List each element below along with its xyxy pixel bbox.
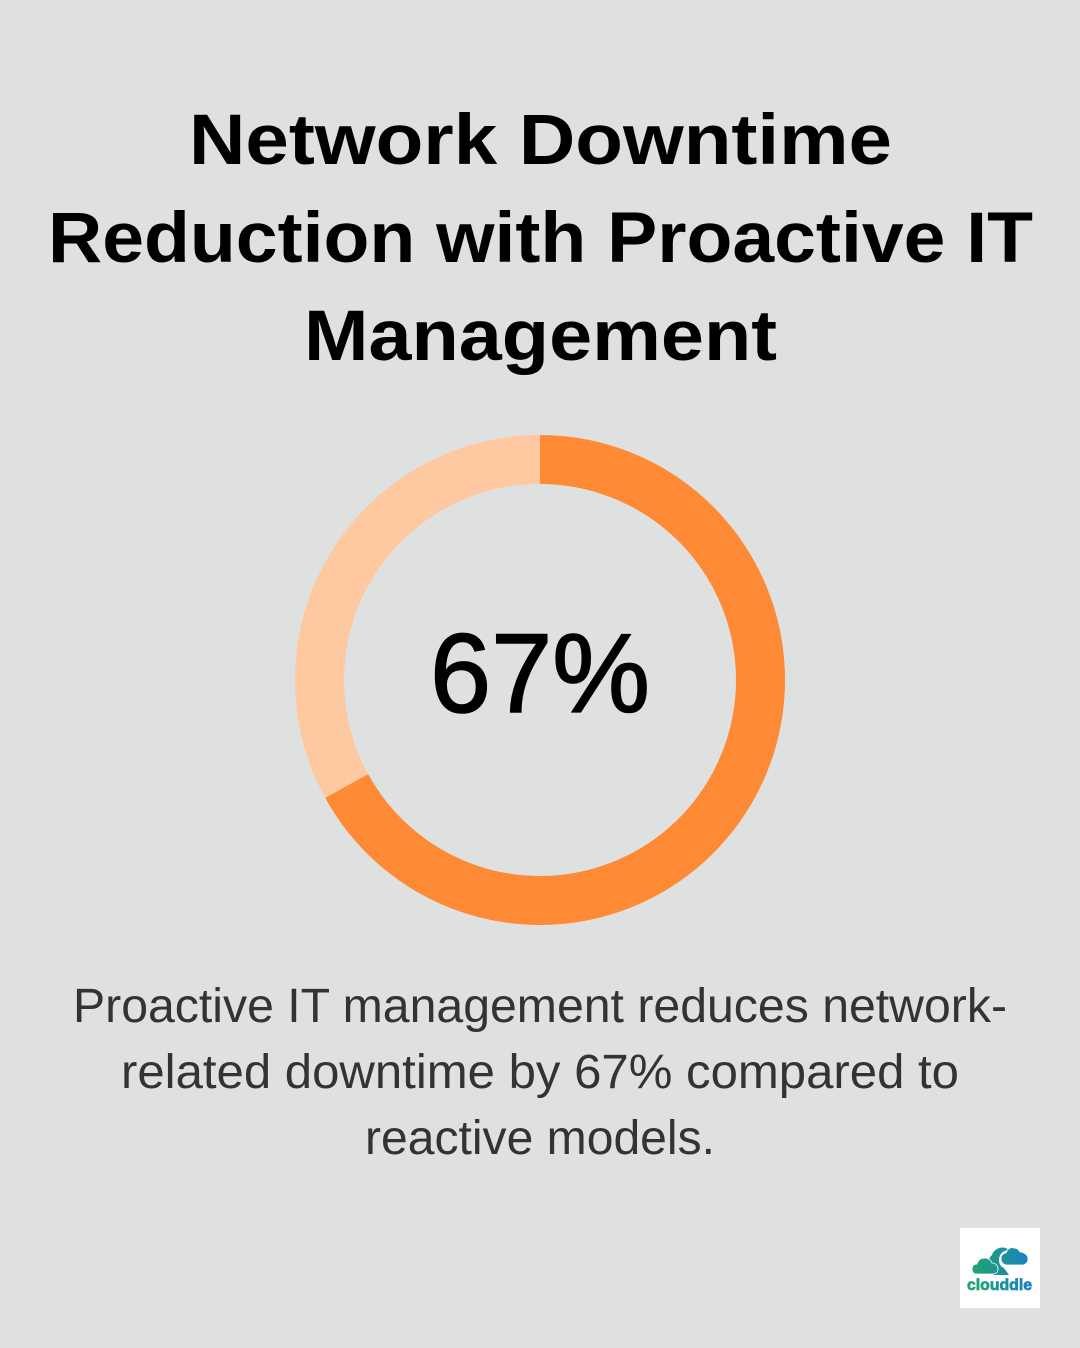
description [73, 980, 1007, 1165]
title: Network Downtime [189, 101, 892, 180]
logo: clouddle [960, 1228, 1040, 1308]
donut chart: 67% [320, 460, 760, 900]
remaining segment [320, 460, 760, 900]
title: Management [304, 297, 777, 376]
67% segment [347, 460, 760, 900]
icon: clouds [972, 1247, 1028, 1275]
description: reactive models. [365, 1112, 715, 1165]
donut value: 67% [430, 611, 650, 736]
title [48, 101, 1033, 376]
description: Proactive IT management reduces network- [73, 980, 1007, 1033]
logo wordmark: clouddle [967, 1277, 1032, 1294]
description: related downtime by 67% compared to [121, 1046, 959, 1099]
title: Reduction with Proactive IT [48, 199, 1033, 278]
